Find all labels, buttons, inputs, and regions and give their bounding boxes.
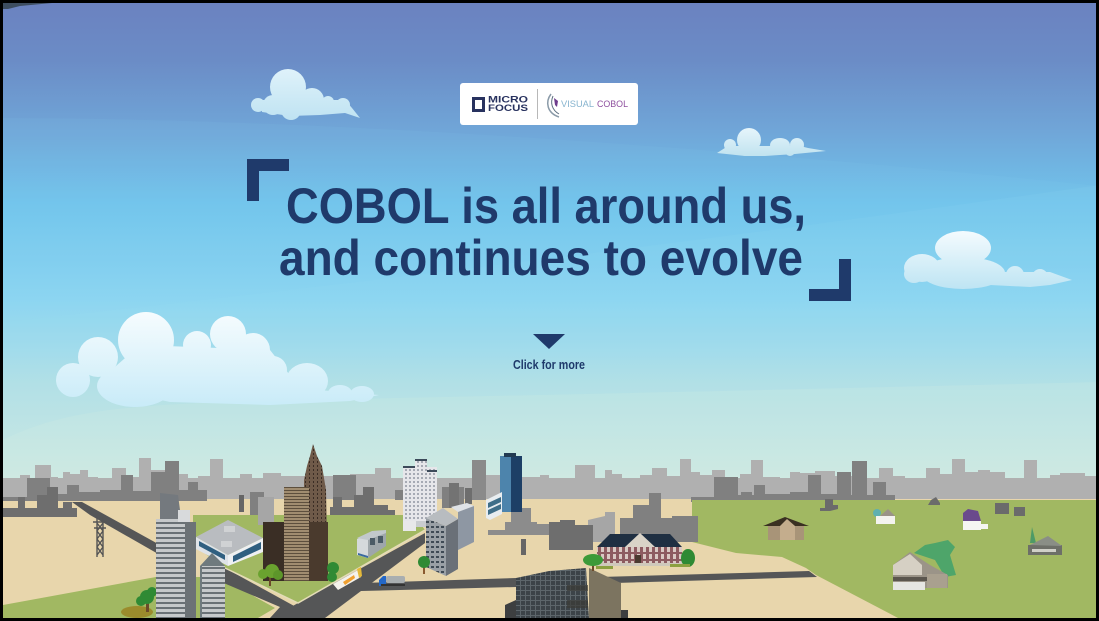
- house: brown: [763, 517, 809, 540]
- small white block: [486, 492, 502, 520]
- sky light bands: [0, 118, 1099, 480]
- front dark glass building: [505, 568, 628, 618]
- tower: second left: [200, 553, 225, 618]
- centre grey block: [549, 493, 698, 550]
- small dark far houses: [820, 497, 1025, 516]
- house: purple roof: [963, 509, 988, 530]
- cloud: top right: [717, 128, 826, 156]
- brown skyscraper: [263, 444, 328, 581]
- skyline: dark left: [3, 461, 207, 501]
- skyline: light: [3, 458, 1096, 499]
- low office building: [196, 520, 263, 566]
- icon: Visual COBOL swirl: [548, 94, 559, 117]
- sand ground: [3, 499, 1096, 618]
- school building: [597, 533, 682, 566]
- bracket: bottom right: [809, 259, 851, 301]
- small office pair: [357, 530, 386, 558]
- green field: right: [692, 500, 1096, 618]
- far buildings: [239, 460, 526, 555]
- tower: front left: [156, 493, 196, 618]
- skyline: dark near left: [3, 487, 77, 517]
- icon: Micro Focus square: [472, 97, 485, 112]
- green field: centre: [193, 515, 425, 603]
- Micro Focus wordmark: MICRO: [488, 94, 528, 104]
- title: and continues to evolve: [279, 230, 803, 286]
- green field: bottom left: [3, 577, 275, 618]
- jagged grey buildings: [488, 508, 549, 535]
- tree by office: [418, 556, 430, 574]
- Micro Focus wordmark: FOCUS: [488, 103, 528, 113]
- white tower: [403, 459, 437, 531]
- arrow: click for more: [533, 334, 565, 349]
- pylon: [93, 517, 107, 557]
- cloud: right: [904, 231, 1072, 289]
- grey office towers: [426, 503, 474, 576]
- cloud: top left: [251, 69, 360, 120]
- school trees: [583, 549, 695, 571]
- skyline: dark near centre: [333, 475, 403, 500]
- small tank truck: [379, 576, 405, 586]
- bush and tree: bottom left: [121, 587, 157, 618]
- roads: [72, 502, 817, 618]
- logo badge: [460, 83, 638, 125]
- corner artefact: [3, 3, 52, 9]
- cloud: large left: [56, 312, 379, 407]
- blue tower: [500, 453, 522, 512]
- house: white: [873, 509, 895, 524]
- title: COBOL is all around us,: [286, 178, 806, 234]
- house: right: [1028, 527, 1062, 555]
- click for more label: Click for more: [513, 357, 585, 372]
- skyline: dark right: [691, 461, 895, 502]
- tanker truck: [333, 567, 362, 590]
- bracket: top left: [247, 159, 289, 201]
- trees by skyscraper: [258, 562, 339, 586]
- Visual COBOL wordmark: VISUAL: [561, 99, 594, 109]
- Micro Focus wordmark: [488, 94, 528, 113]
- title: [279, 178, 806, 286]
- logo badge: COBOL: [597, 99, 628, 109]
- house: large with trees: [893, 540, 956, 590]
